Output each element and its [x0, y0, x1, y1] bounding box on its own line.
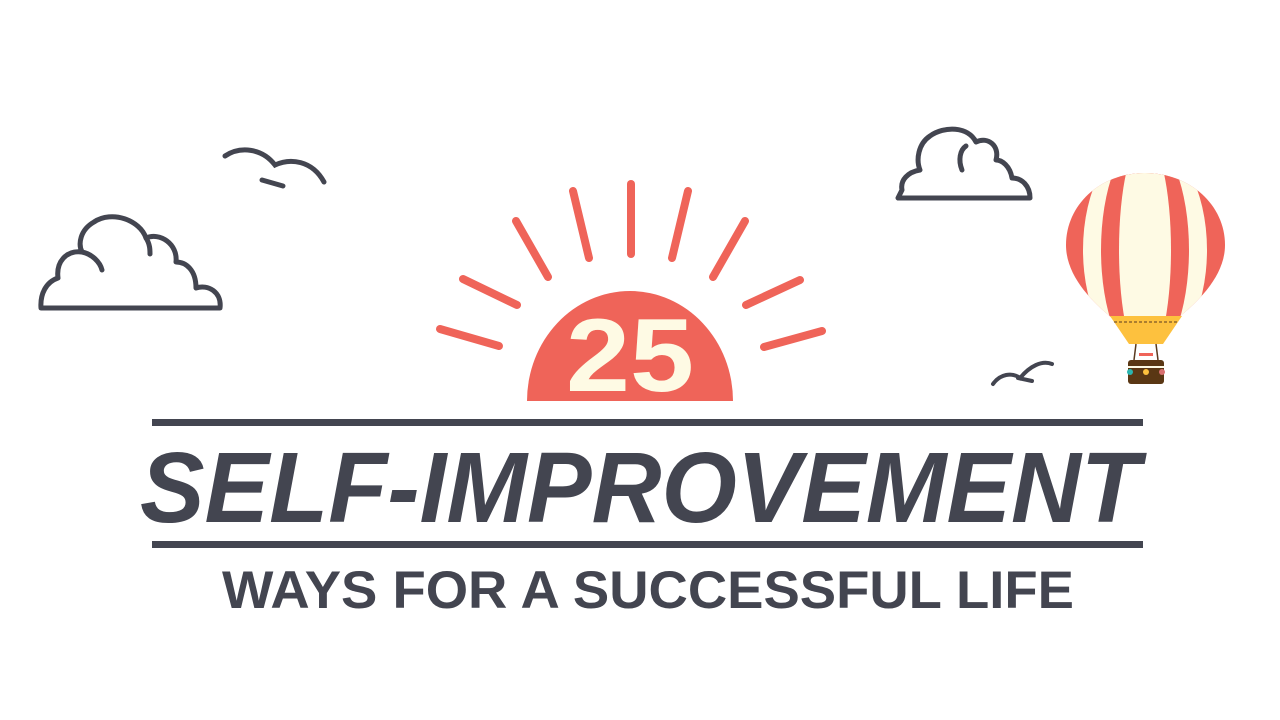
icon: sun rays [440, 184, 822, 347]
infographic canvas [38, 126, 1225, 608]
title: SELF-IMPROVEMENT [140, 432, 1148, 544]
icon: left cloud [41, 217, 220, 308]
icon: right cloud [898, 129, 1030, 198]
subtitle: WAYS FOR A SUCCESSFUL LIFE [222, 561, 1074, 620]
icon: small bird [993, 363, 1052, 384]
sun with number 25 [527, 291, 733, 414]
icon: bird top [225, 150, 324, 186]
icon: hot air balloon [1066, 173, 1225, 384]
sun with number 25: 25 [566, 298, 694, 414]
divider bars [152, 419, 1143, 548]
